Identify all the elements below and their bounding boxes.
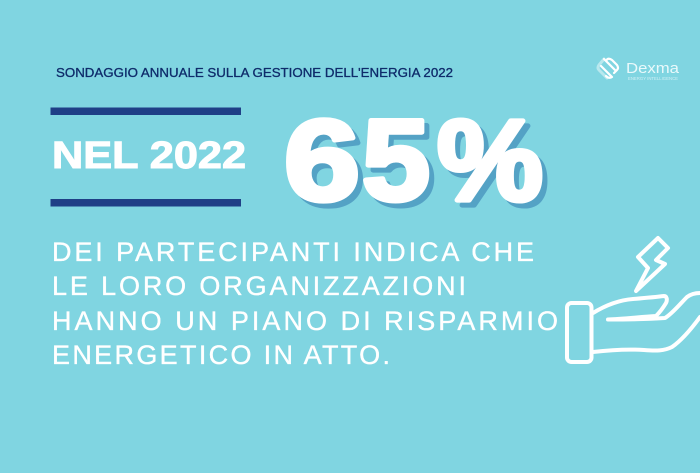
number face — [284, 97, 543, 225]
logo: Dexma: ENERGY INTELLIGENCE — [628, 76, 678, 81]
top bar — [50, 108, 241, 115]
number shadow — [289, 102, 548, 230]
logo: Dexma: Dexma — [626, 61, 680, 77]
number shadow: % — [442, 102, 548, 230]
heading: year: NEL 2022 — [52, 135, 246, 177]
icon: bolt — [636, 238, 668, 291]
title: survey name: SONDAGGIO ANNUALE SULLA GESTIONE DELL'ENERGIA 2022 — [56, 66, 453, 80]
number face: 6 — [284, 97, 360, 225]
text block: description — [52, 237, 558, 370]
icon: hand with lightning bolt — [567, 238, 700, 362]
icon: cuff — [567, 303, 592, 362]
number face: 5 — [362, 97, 430, 225]
text block: description: HANNO UN PIANO DI RISPARMIO — [52, 306, 558, 336]
bottom bar — [50, 199, 241, 206]
text block: description: LE LORO ORGANIZZAZIONI — [52, 271, 466, 301]
big number: 65% — [284, 97, 548, 230]
number shadow: 6 — [289, 102, 365, 230]
number shadow: 5 — [367, 102, 435, 230]
icon: hand — [593, 293, 700, 352]
logo: Dexma — [598, 59, 680, 81]
text block: description: ENERGETICO IN ATTO. — [52, 340, 390, 370]
text block: description: DEI PARTECIPANTI INDICA CHE — [52, 237, 534, 267]
number face: % — [437, 97, 543, 225]
